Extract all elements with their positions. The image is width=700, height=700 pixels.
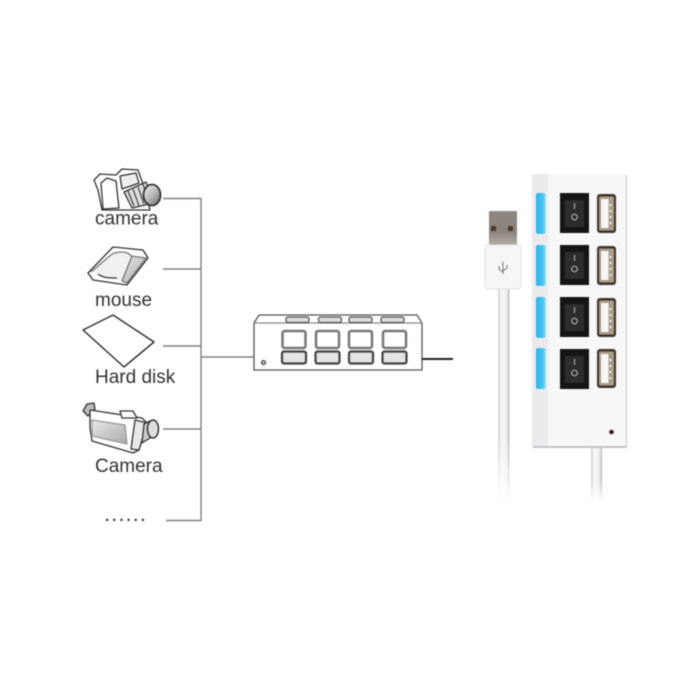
- diagram: hub cable: [422, 358, 453, 360]
- usb port 4: [597, 349, 616, 388]
- metal connector: [489, 211, 517, 246]
- diagram: top buttons: [286, 317, 404, 322]
- diagram: hub outline: [254, 315, 422, 370]
- icon: mouse: [88, 247, 148, 285]
- plug body: [485, 245, 521, 289]
- diagram: indicator: [262, 360, 266, 364]
- label: Hard disk: Hard disk: [95, 367, 176, 388]
- power led: [609, 430, 614, 434]
- rocker switch 3: [560, 297, 589, 337]
- blue indicator strips: [536, 193, 546, 389]
- rocker switch 4: [560, 349, 589, 389]
- label: Camera: Camera: [95, 456, 163, 477]
- photo: hub body: [532, 174, 627, 448]
- photo: usb plug and cable: [485, 211, 521, 502]
- icon: video camera: [83, 403, 158, 453]
- diagram: switches: [282, 331, 406, 348]
- cable: [498, 288, 510, 502]
- usb port 2: [597, 246, 616, 285]
- connection tree lines: [163, 198, 254, 520]
- usb port 1: [597, 194, 616, 233]
- icon: hard disk: [83, 315, 154, 367]
- label: camera: camera: [95, 208, 159, 230]
- label: mouse: mouse: [95, 290, 152, 311]
- icon: photo camera: [94, 169, 160, 210]
- photo: hub cable: [588, 446, 605, 502]
- usb symbol: [499, 262, 507, 274]
- rocker switch 1: [560, 193, 589, 233]
- diagram: ports: [282, 352, 406, 364]
- usb port 3: [597, 298, 616, 337]
- label: ellipsis: ......: [105, 508, 148, 525]
- rocker switch 2: [560, 245, 589, 285]
